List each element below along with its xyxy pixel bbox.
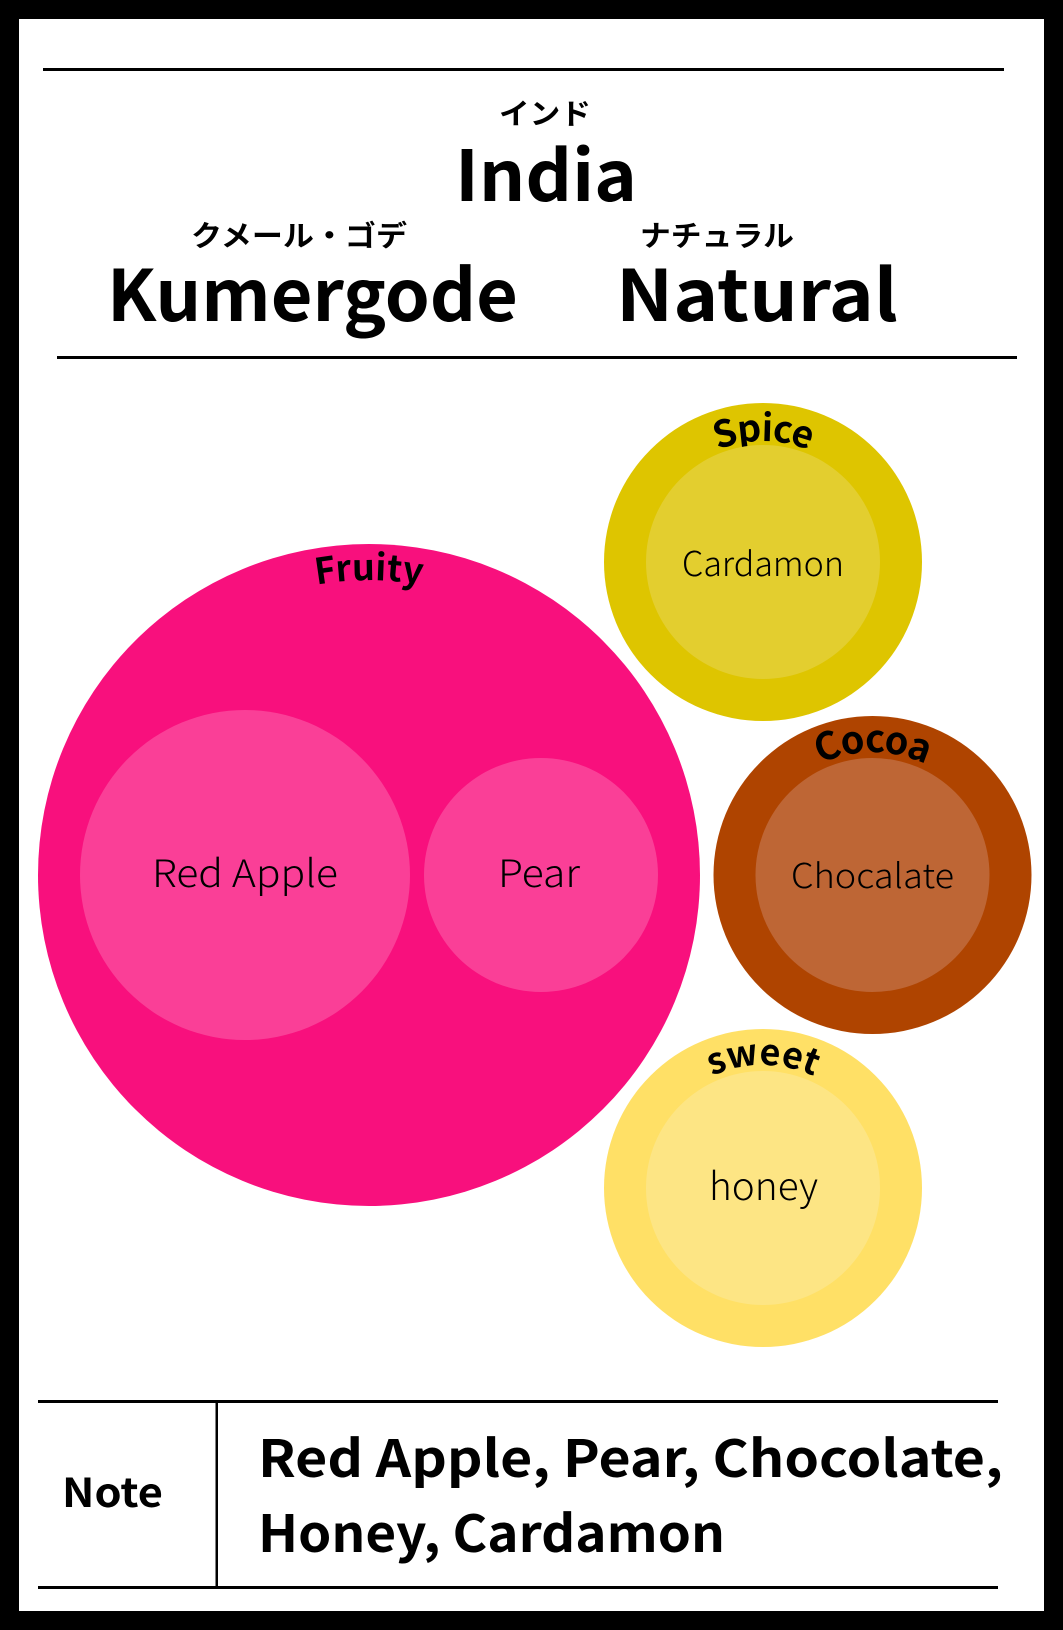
bubble: honey [646,1071,880,1305]
bubble: Pear: Pear [498,843,580,898]
bubble: Spice [604,403,922,721]
label: sweet: sweet [708,1044,820,1076]
bubble: Pear [424,758,658,992]
note label: Note [62,1461,163,1519]
bubble: Fruity [38,544,700,1206]
bubble: Cardamon: Cardamon [682,537,844,586]
farm reading: クメール・ゴデ [191,213,407,255]
bubble: Red Apple: Red Apple [152,843,338,898]
label: Fruity: Fruity [316,551,424,590]
bubble: Cardamon [646,445,880,679]
origin reading: インド [499,91,591,133]
process: Natural: Natural [616,240,898,342]
origin: India: India [455,121,637,222]
bubble: Chocalate: Chocalate [791,849,954,898]
farm: Kumergode: Kumergode [107,240,518,342]
bubble: sweet [604,1029,922,1347]
note text: Red Apple, Pear, Chocolate, [258,1418,1003,1492]
bubble: Red Apple [80,710,410,1040]
bubble: Chocalate [756,758,990,992]
bubble: honey: honey [709,1156,818,1211]
label: Cocoa: Cocoa [816,730,929,763]
process reading: ナチュラル [640,213,794,255]
label: Spice: Spice [714,411,812,448]
note table [38,1400,1003,1589]
bubble: Cocoa [714,716,1032,1034]
title block [107,91,898,342]
note text [258,1418,1003,1567]
note text: Honey, Cardamon [258,1493,725,1567]
